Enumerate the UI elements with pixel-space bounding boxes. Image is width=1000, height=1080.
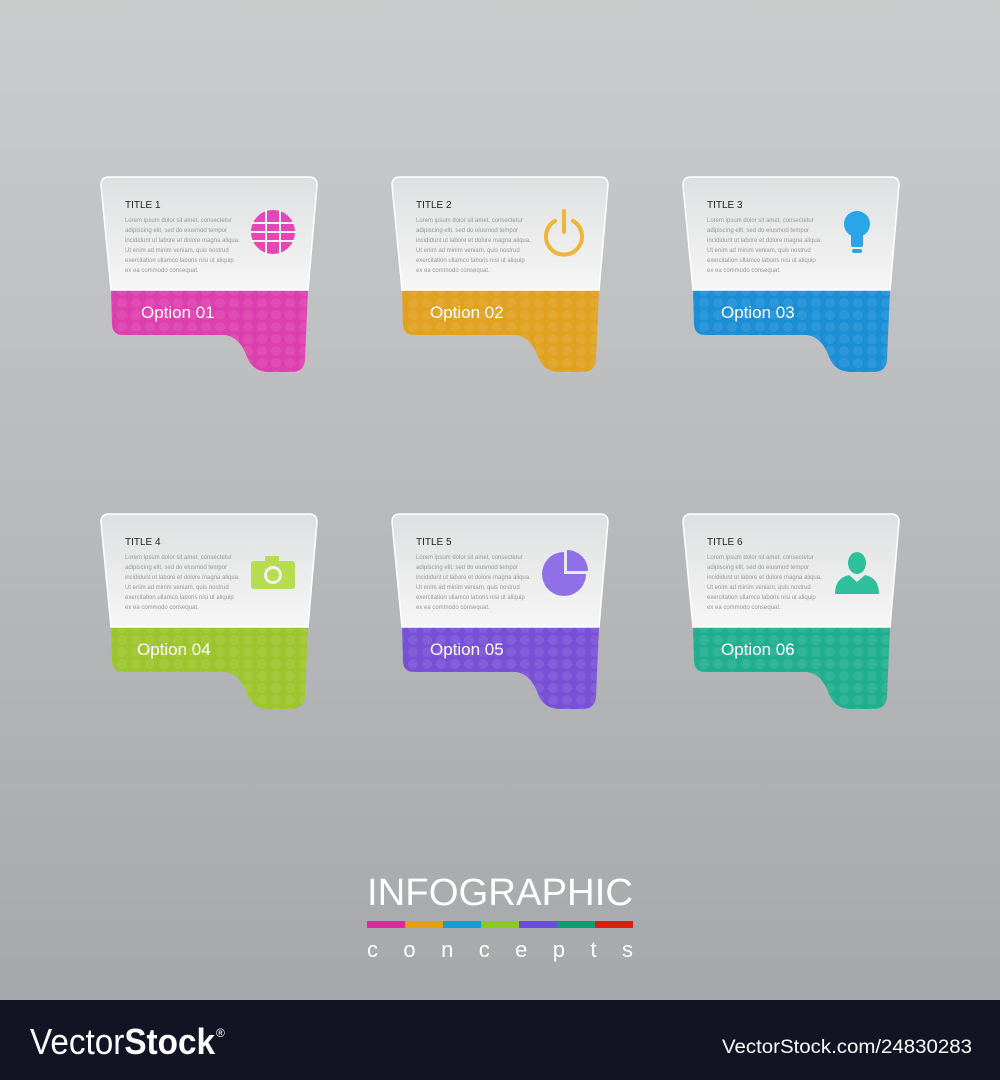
card 1: Lorem ipsum dolor sit amet, consectetur	[125, 218, 232, 224]
card 1: TITLE 1	[125, 200, 161, 211]
card 1: exercitation ullamco laboris nisi ut aliquip	[125, 258, 234, 264]
card 3: Lorem ipsum dolor sit amet, consectetur	[707, 218, 814, 224]
icon: user	[835, 552, 879, 594]
card 4: Ut enim ad minim veniam, quis nostrud	[125, 585, 229, 591]
card 6: exercitation ullamco laboris nisi ut aliquip	[707, 595, 816, 601]
card 6: incididunt ut labore et dolore magna aliqua.	[707, 575, 822, 581]
card 5: Ut enim ad minim veniam, quis nostrud	[416, 585, 520, 591]
card 3: adipiscing elit, sed do eiusmod tempor	[707, 228, 809, 234]
card 3: Ut enim ad minim veniam, quis nostrud	[707, 248, 811, 254]
card 3	[683, 177, 899, 372]
card 3: TITLE 3	[707, 200, 743, 211]
card 1	[101, 177, 317, 372]
card 5: ex ea commodo consequat.	[416, 605, 490, 611]
card 3: ex ea commodo consequat.	[707, 268, 781, 274]
card 5	[392, 514, 608, 709]
card 1: incididunt ut labore et dolore magna aliqua.	[125, 238, 240, 244]
card 2: exercitation ullamco laboris nisi ut aliquip	[416, 258, 525, 264]
card 4: incididunt ut labore et dolore magna aliqua.	[125, 575, 240, 581]
card 6: ex ea commodo consequat.	[707, 605, 781, 611]
card 2: adipiscing elit, sed do eiusmod tempor	[416, 228, 518, 234]
card 6	[683, 514, 899, 709]
card 5: Lorem ipsum dolor sit amet, consectetur	[416, 555, 523, 561]
card 1: Ut enim ad minim veniam, quis nostrud	[125, 248, 229, 254]
title: INFOGRAPHIC concepts: INFOGRAPHIC	[367, 872, 633, 914]
card 4	[101, 514, 317, 709]
footer bar: ®	[216, 1026, 225, 1040]
card 1: Option 01	[141, 303, 215, 322]
card 2	[392, 177, 608, 372]
card 6: adipiscing elit, sed do eiusmod tempor	[707, 565, 809, 571]
card 1: ex ea commodo consequat.	[125, 268, 199, 274]
card 5: adipiscing elit, sed do eiusmod tempor	[416, 565, 518, 571]
icon: bulb	[844, 211, 870, 253]
title: INFOGRAPHIC concepts: concepts	[367, 937, 633, 962]
card 5: TITLE 5	[416, 537, 452, 548]
icon: camera	[251, 556, 295, 589]
card 3: incididunt ut labore et dolore magna aliqua.	[707, 238, 822, 244]
card 2: Lorem ipsum dolor sit amet, consectetur	[416, 218, 523, 224]
card 1: adipiscing elit, sed do eiusmod tempor	[125, 228, 227, 234]
card 5: exercitation ullamco laboris nisi ut aliquip	[416, 595, 525, 601]
icon: globe	[251, 210, 295, 254]
card 2: TITLE 2	[416, 200, 452, 211]
card 4: Option 04	[137, 640, 211, 659]
card 6: TITLE 6	[707, 537, 743, 548]
card 4: adipiscing elit, sed do eiusmod tempor	[125, 565, 227, 571]
card 2: Option 02	[430, 303, 504, 322]
card 2: ex ea commodo consequat.	[416, 268, 490, 274]
card 4: ex ea commodo consequat.	[125, 605, 199, 611]
card 5: Option 05	[430, 640, 504, 659]
title: INFOGRAPHIC concepts	[367, 872, 633, 962]
footer bar	[0, 1000, 1000, 1080]
card 6: Ut enim ad minim veniam, quis nostrud	[707, 585, 811, 591]
icon: power	[546, 211, 582, 255]
card 6: Lorem ipsum dolor sit amet, consectetur	[707, 555, 814, 561]
card 4: exercitation ullamco laboris nisi ut aliquip	[125, 595, 234, 601]
card 5: incididunt ut labore et dolore magna aliqua.	[416, 575, 531, 581]
footer bar: VectorStock	[30, 1021, 216, 1062]
card 2: incididunt ut labore et dolore magna aliqua.	[416, 238, 531, 244]
icon: pie chart	[542, 550, 588, 596]
card 2: Ut enim ad minim veniam, quis nostrud	[416, 248, 520, 254]
footer bar: VectorStock.com/24830283	[722, 1037, 972, 1058]
card 3: Option 03	[721, 303, 795, 322]
card 6: Option 06	[721, 640, 795, 659]
card 4: Lorem ipsum dolor sit amet, consectetur	[125, 555, 232, 561]
card 3: exercitation ullamco laboris nisi ut aliquip	[707, 258, 816, 264]
card 4: TITLE 4	[125, 537, 161, 548]
